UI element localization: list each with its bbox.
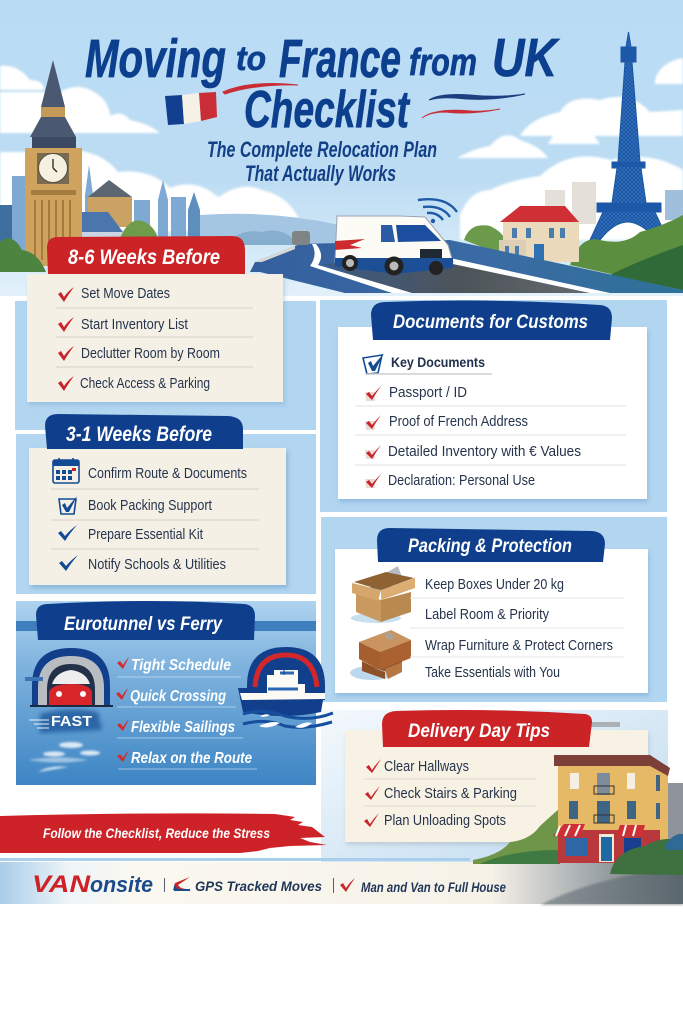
logo: vanonsite: VAN [32,871,91,898]
icon: apartment building [553,755,683,863]
sub-heading: key documents: Key Documents [391,354,485,370]
clouds [0,58,683,240]
footer strip [0,858,683,905]
banner: follow the checklist [0,813,327,853]
road [250,231,683,293]
checklist: delivery: Plan Unloading Spots [384,812,506,829]
icon: fast label [29,709,102,733]
checklist: documents [365,384,581,489]
trees left [0,220,158,272]
title [85,28,560,139]
text: man and van: Man and Van to Full House [361,880,506,895]
text: gps tracked moves: GPS Tracked Moves [195,878,322,894]
title: UK [492,28,560,88]
logo: vanonsite: onsite [90,872,153,897]
checklist: documents: Detailed Inventory with € Values [388,443,581,460]
bushes [473,808,560,864]
heading tab: 3-1 weeks before [45,414,243,449]
checks and rows: Relax on the Route [131,750,252,767]
header scene [0,0,683,296]
checklist: packing: Label Room & Priority [425,606,549,623]
checklist: documents: Proof of French Address [389,413,528,430]
icon: house [499,206,579,262]
checklist: 8-6 weeks [58,285,220,392]
icon: tunnel with car [25,648,113,707]
icon: blue checks [58,525,78,571]
heading tab: packing and protection: Packing & Protection [408,536,572,557]
checklist: 3-1 weeks: Prepare Essential Kit [88,526,204,543]
checklist: packing: Take Essentials with You [425,664,560,681]
checks and rows: Quick Crossing [130,688,226,705]
foam [28,742,100,772]
icon: big ben [25,60,82,266]
panel: 3-1 weeks before [16,414,316,594]
right hills [464,215,683,290]
icon: footer check [340,878,355,892]
title swooshes [223,84,525,118]
title: from [409,42,477,84]
panel: 8-6 weeks before [15,236,316,430]
panel: delivery day tips [321,710,668,868]
checklist: packing: Keep Boxes Under 20 kg [425,576,564,593]
panel: packing and protection [321,517,667,702]
bush right [610,834,683,875]
left buildings [80,180,132,246]
panel: documents for customs [320,300,667,512]
checks and rows: Flexible Sailings [131,719,235,736]
panel: eurotunnel vs ferry [16,601,316,785]
icon: open box [351,566,415,623]
checklist: 8-6 weeks: Set Move Dates [81,285,170,302]
sub-heading: key documents [363,353,492,374]
checklist: 3-1 weeks: Notify Schools & Utilities [88,556,226,573]
checklist: delivery: Check Stairs & Parking [384,785,517,802]
checklist: delivery: Clear Hallways [384,758,469,775]
heading tab: delivery day tips: Delivery Day Tips [408,721,550,742]
title: Checklist [244,81,411,139]
checklist: 3-1 weeks: Confirm Route & Documents [88,465,247,482]
heading tab: 3-1 weeks before: 3-1 Weeks Before [66,423,212,446]
heading tab: documents for customs: Documents for Customs [393,312,588,333]
checklist: packing [425,576,613,681]
heading tab: 8-6 weeks before [47,236,245,274]
checklist: 3-1 weeks [88,465,247,573]
checklist: 3-1 weeks: Book Packing Support [88,497,213,514]
icon: van [335,216,453,276]
title: France [279,29,401,89]
heading tab: eurotunnel vs ferry: Eurotunnel vs Ferry [64,614,223,635]
checks and rows: Tight Schedule [131,657,231,674]
title: to [236,40,266,78]
icon: calendar [53,458,79,483]
checklist: documents: Passport / ID [389,384,467,401]
checklist: 8-6 weeks: Check Access & Parking [80,375,210,392]
icon: fast label: FAST [51,713,92,730]
icon: french flag [165,92,217,125]
icon: gps swoosh [173,877,190,891]
icon: wifi signal [418,199,457,222]
checklist: packing: Wrap Furniture & Protect Corners [425,637,613,654]
heading tab: documents for customs [371,301,612,340]
icon: ferry [238,647,333,728]
icon: eiffel tower [590,32,668,240]
heading tab: 8-6 weeks before: 8-6 Weeks Before [68,246,220,269]
heading tab: eurotunnel vs ferry [36,601,255,640]
logo: vanonsite [32,871,153,898]
banner: follow the checklist: Follow the Checklist, Reduce the Stress [43,825,270,841]
icon: stacked boxes [350,630,411,680]
subtitle: That Actually Works [245,161,396,186]
checklist: 8-6 weeks: Start Inventory List [81,316,189,333]
subtitle: The Complete Relocation Plan [207,137,437,162]
icon: checkbox [59,496,77,514]
title: Moving [85,29,226,89]
checklist: 8-6 weeks: Declutter Room by Room [81,345,220,362]
checklist: delivery [364,758,517,829]
heading tab: packing and protection [377,528,605,562]
checklist: documents: Declaration: Personal Use [388,472,535,489]
heading tab: delivery day tips [382,710,592,747]
distant skyline [0,165,683,270]
checks and rows [116,657,257,769]
subtitle [207,137,437,186]
